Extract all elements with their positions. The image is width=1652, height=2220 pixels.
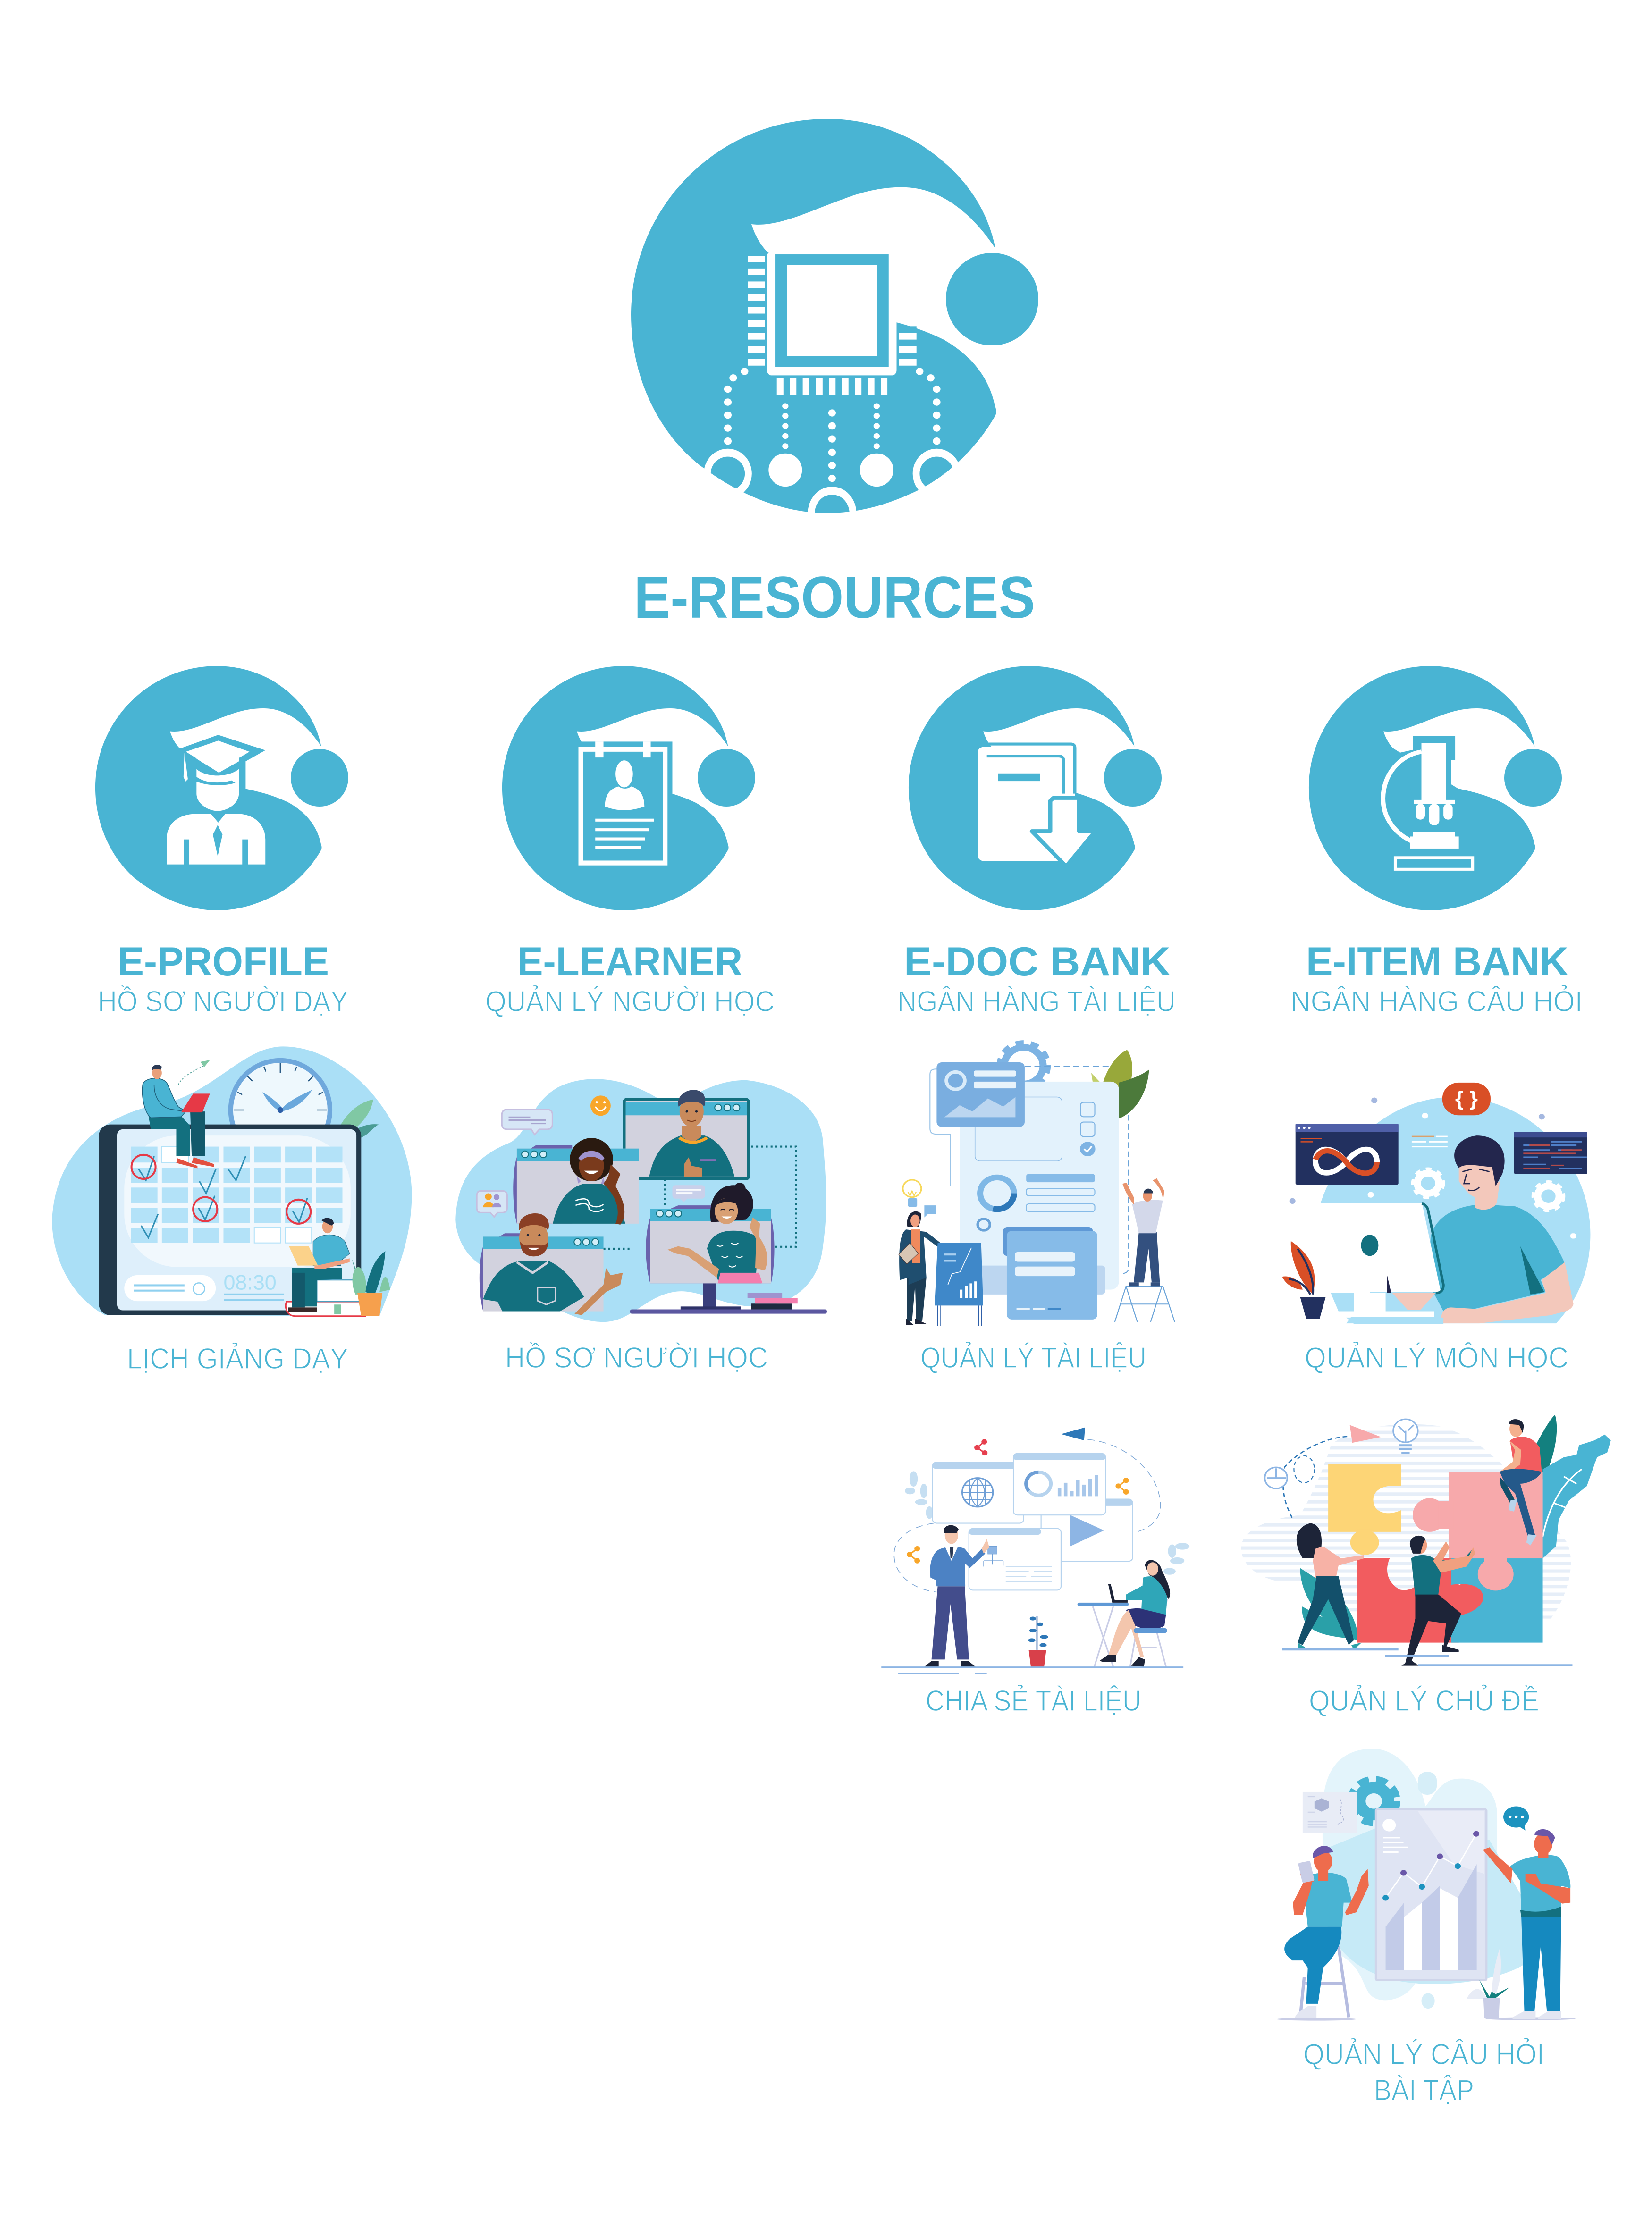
id card [579, 741, 672, 866]
desk [1078, 1584, 1129, 1667]
banana leaf [1543, 1435, 1611, 1558]
illustration: course management [1282, 1083, 1590, 1324]
paper plane pink [1350, 1425, 1381, 1443]
illustration: topic management [1241, 1415, 1611, 1666]
gears [1413, 1169, 1563, 1210]
main logo: e-resources chip icon [631, 119, 1038, 536]
icon: e-learner id card [502, 666, 755, 910]
left foliage [1300, 1568, 1359, 1640]
leaves left [905, 1471, 933, 1519]
soft gradient blob [1323, 1825, 1526, 1984]
leaves [340, 1100, 379, 1138]
man presenting [924, 1525, 989, 1667]
icon: e-profile graduate [95, 666, 348, 910]
person seated on books [288, 1218, 350, 1312]
woman at desk [1099, 1560, 1170, 1667]
light bulb [903, 1180, 921, 1207]
person on top with laptop [143, 1060, 214, 1169]
folder [1003, 1227, 1097, 1320]
chat bubble [502, 1110, 552, 1135]
gear [1351, 1779, 1397, 1823]
white text lines [1412, 1136, 1448, 1147]
caption: question management line 2: BÀI TẬP [1374, 2074, 1474, 2107]
decorative dots [1290, 1098, 1576, 1238]
woman pushing [1297, 1523, 1364, 1650]
plant [1467, 1949, 1510, 2018]
title: E-RESOURCES [634, 565, 1035, 631]
chair [1130, 1599, 1167, 1667]
caption: document sharing: CHIA SẺ TÀI LIỆU [926, 1685, 1141, 1717]
background shape [1323, 1749, 1515, 2000]
caption: document management: QUẢN LÝ TÀI LIỆU [920, 1342, 1146, 1374]
small chat bubble [672, 1185, 705, 1202]
donut and list [978, 1174, 1095, 1230]
red pot plant [1028, 1616, 1048, 1667]
man left [1277, 1846, 1369, 2021]
time text: 08:30 [223, 1270, 277, 1295]
diagram window [969, 1529, 1061, 1590]
illustration: document sharing [881, 1427, 1189, 1673]
ground line [881, 1667, 1183, 1673]
man right [1483, 1829, 1576, 2020]
monitor stand [630, 1282, 827, 1314]
subheading: e-doc bank: NGÂN HÀNG TÀI LIỆU [897, 985, 1176, 1018]
tablet [99, 1125, 361, 1315]
presentation board [935, 1243, 983, 1326]
striped background blob [1241, 1424, 1571, 1619]
document panel [960, 1082, 1119, 1290]
caption: learner profile: HỒ SƠ NGƯỜI HỌC [505, 1342, 768, 1374]
light bulb icon [1393, 1419, 1418, 1453]
man pushing [1401, 1536, 1475, 1666]
small dot [1421, 1993, 1435, 2009]
yellow puzzle piece [1328, 1464, 1401, 1555]
heading: e-profile: E-PROFILE [118, 939, 329, 984]
background blob [455, 1079, 826, 1322]
chart board [1376, 1809, 1486, 1980]
gear [999, 1043, 1048, 1089]
leaves right [1163, 1543, 1189, 1575]
map card [1303, 1792, 1357, 1833]
background blob [52, 1046, 412, 1316]
subheading: e-item bank: NGÂN HÀNG CÂU HỎI [1290, 985, 1583, 1018]
share icon red [975, 1440, 987, 1455]
clock [231, 1060, 330, 1160]
illustration: learner profile [455, 1079, 827, 1322]
code braces: { } [1455, 1087, 1478, 1110]
folder and arrow [978, 744, 1096, 866]
group bubble [477, 1191, 507, 1217]
illustration: question management [1277, 1749, 1576, 2021]
subheading: e-profile: HỒ SƠ NGƯỜI DẠY [98, 985, 348, 1018]
icon blob [95, 666, 322, 910]
chart card [936, 1062, 1025, 1127]
window: woman with afro [513, 1138, 639, 1225]
dashed connector [1025, 1066, 1129, 1274]
paper plane [1061, 1427, 1085, 1440]
potted plant [1282, 1241, 1326, 1319]
dashed arcs [894, 1439, 1160, 1592]
caption: topic management: QUẢN LÝ CHỦ ĐỀ [1309, 1685, 1539, 1717]
dashed loop [1294, 1456, 1315, 1483]
dotted connectors [604, 1147, 796, 1249]
share icon orange right [1116, 1479, 1128, 1494]
window: top right man [624, 1090, 749, 1179]
graduate figure [167, 735, 265, 865]
laptop [1321, 1203, 1443, 1317]
teal puzzle piece [1451, 1558, 1543, 1643]
share icon orange left [908, 1547, 919, 1563]
code lines small [1412, 1136, 1434, 1137]
check marks [139, 1156, 307, 1237]
tablet screen [117, 1129, 356, 1311]
icon blob [502, 666, 729, 910]
caption: question management line 1: QUẢN LÝ CÂU HỎI [1303, 2038, 1544, 2071]
red circles [132, 1155, 311, 1224]
microscope [1383, 736, 1473, 869]
speech tag [924, 1205, 936, 1218]
icon: e-doc bank folder [909, 666, 1162, 910]
person [1428, 1135, 1574, 1323]
subheading: e-learner: QUẢN LÝ NGƯỜI HỌC [485, 985, 775, 1018]
chart board content [1382, 1811, 1484, 1970]
illustration: teaching schedule [52, 1046, 412, 1316]
icon circle [291, 749, 348, 807]
light band [960, 1266, 1105, 1295]
icon: e-item bank microscope [1309, 666, 1562, 910]
icon circle [1104, 749, 1162, 807]
logo blob [631, 119, 996, 513]
clock icon [1265, 1467, 1287, 1488]
base band [1346, 1318, 1443, 1324]
emoji [590, 1095, 611, 1116]
icon blob [909, 666, 1135, 910]
man sitting on pink piece [1500, 1419, 1542, 1545]
heading: e-item bank: E-ITEM BANK [1306, 939, 1568, 984]
caption: course management: QUẢN LÝ MÔN HỌC [1305, 1342, 1568, 1374]
dashed flight path [1283, 1437, 1347, 1518]
checkboxes [1080, 1102, 1095, 1156]
background circle [1321, 1097, 1590, 1323]
man on ladder [1115, 1178, 1175, 1322]
illustration: document management [899, 1043, 1175, 1326]
video window [1041, 1499, 1133, 1561]
leaves [1091, 1050, 1149, 1118]
red puzzle piece [1357, 1558, 1484, 1643]
chip and circuit [707, 252, 957, 536]
caption: teaching schedule: LỊCH GIẢNG DẠY [127, 1343, 348, 1375]
window: bearded man [480, 1213, 623, 1315]
speech bubble [1503, 1807, 1529, 1831]
screen highlight [124, 1135, 351, 1267]
heading: e-doc bank: E-DOC BANK [904, 939, 1171, 984]
calendar grid [131, 1147, 343, 1243]
ground lines [1282, 1649, 1572, 1665]
books stack [286, 1280, 365, 1316]
time bar [124, 1275, 284, 1301]
logo satellite circle [946, 253, 1038, 345]
inner outline panel [975, 1097, 1062, 1161]
heading: e-learner: E-LEARNER [517, 939, 742, 984]
leaf top [1533, 1415, 1557, 1479]
pink puzzle piece [1413, 1472, 1543, 1590]
woman presenter [899, 1211, 951, 1325]
icon circle [1504, 749, 1562, 807]
line chart [1382, 1831, 1479, 1901]
infinity window [1296, 1124, 1399, 1185]
potted plant [352, 1251, 390, 1316]
code badge [1442, 1083, 1491, 1115]
icon circle [698, 749, 755, 807]
code window [1514, 1132, 1587, 1174]
stool [1300, 1946, 1349, 2018]
outline card [930, 1069, 952, 1186]
globe window [933, 1462, 1024, 1523]
icon blob [1309, 666, 1535, 910]
stats window [1013, 1454, 1105, 1515]
window: woman with bun [646, 1183, 775, 1283]
small pill [1418, 1772, 1437, 1795]
